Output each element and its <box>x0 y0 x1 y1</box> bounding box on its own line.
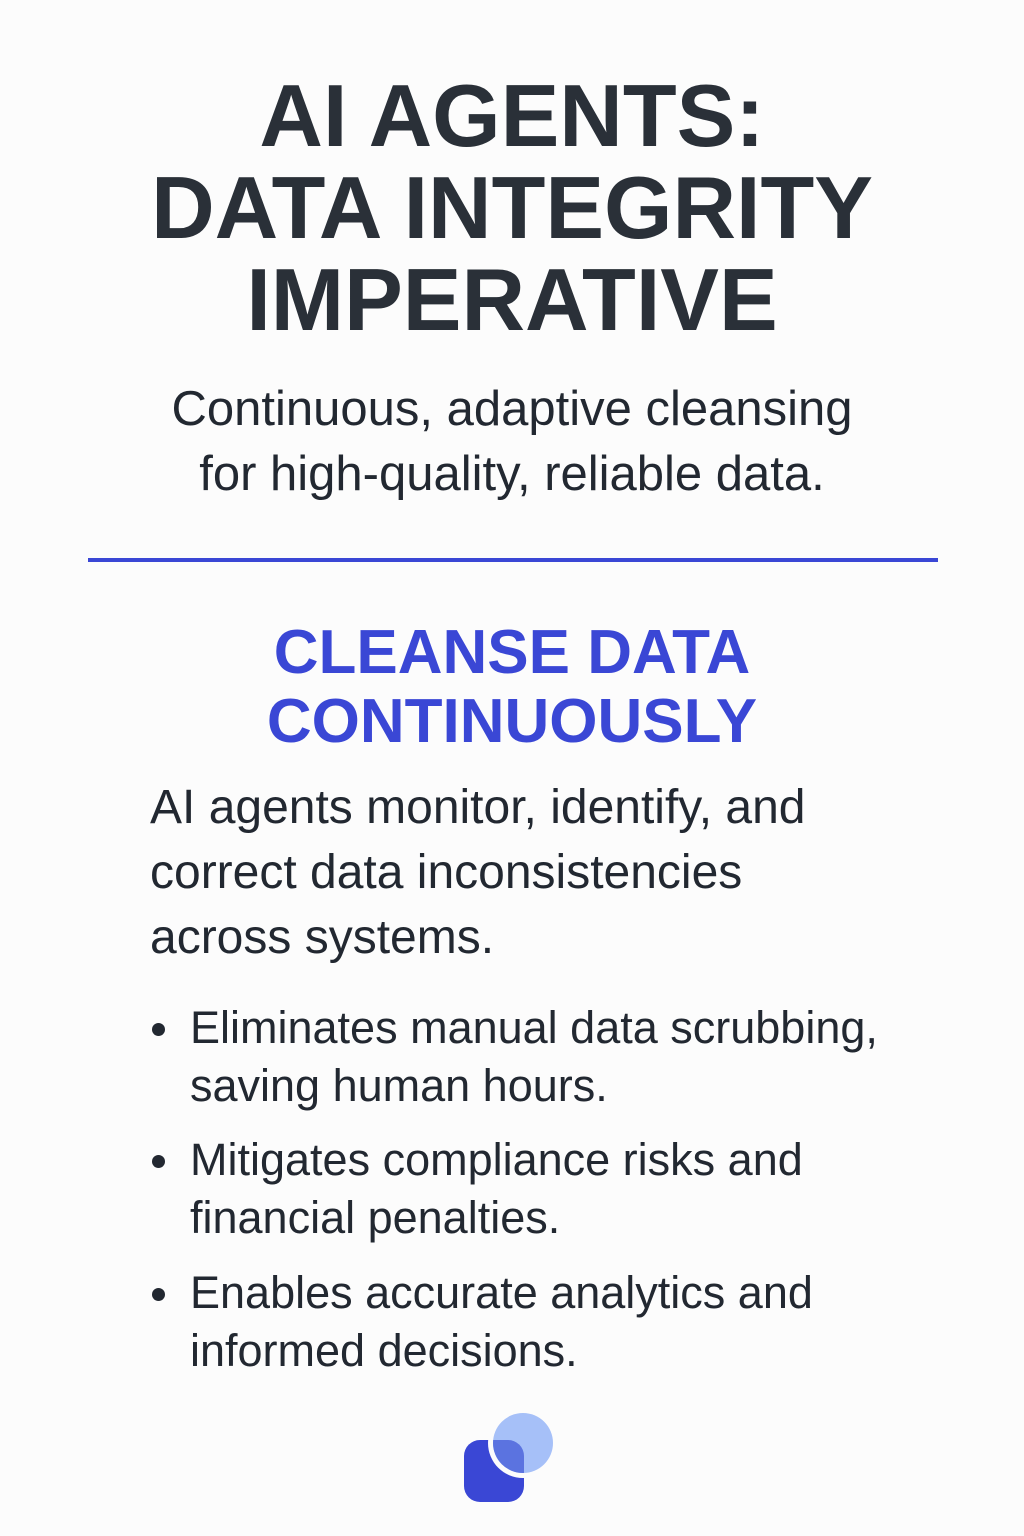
title: IMPERATIVE <box>246 250 778 349</box>
section heading <box>267 618 757 756</box>
title <box>151 66 873 349</box>
bullet 3 <box>152 1267 813 1376</box>
bullet 2: Mitigates compliance risks and <box>190 1134 803 1185</box>
subtitle: Continuous, adaptive cleansing <box>171 382 853 436</box>
bullet 3: informed decisions. <box>190 1325 578 1376</box>
subtitle: for high-quality, reliable data. <box>199 447 825 501</box>
subtitle <box>171 382 853 501</box>
bullet 1: saving human hours. <box>190 1060 608 1111</box>
section heading: CLEANSE DATA <box>274 618 750 687</box>
body text <box>150 781 806 964</box>
icon: logo <box>464 1413 553 1502</box>
body text: correct data inconsistencies <box>150 846 742 899</box>
title: DATA INTEGRITY <box>151 158 873 257</box>
title: AI AGENTS: <box>259 66 765 165</box>
bullet 1: Eliminates manual data scrubbing, <box>190 1002 878 1053</box>
body text: across systems. <box>150 911 494 964</box>
bullet 2 <box>152 1134 803 1243</box>
divider line <box>88 558 938 562</box>
bullet 2: financial penalties. <box>190 1192 560 1243</box>
bullet 3: Enables accurate analytics and <box>190 1267 813 1318</box>
body text: AI agents monitor, identify, and <box>150 781 806 834</box>
section heading: CONTINUOUSLY <box>267 687 757 756</box>
bullet 1 <box>152 1002 878 1111</box>
